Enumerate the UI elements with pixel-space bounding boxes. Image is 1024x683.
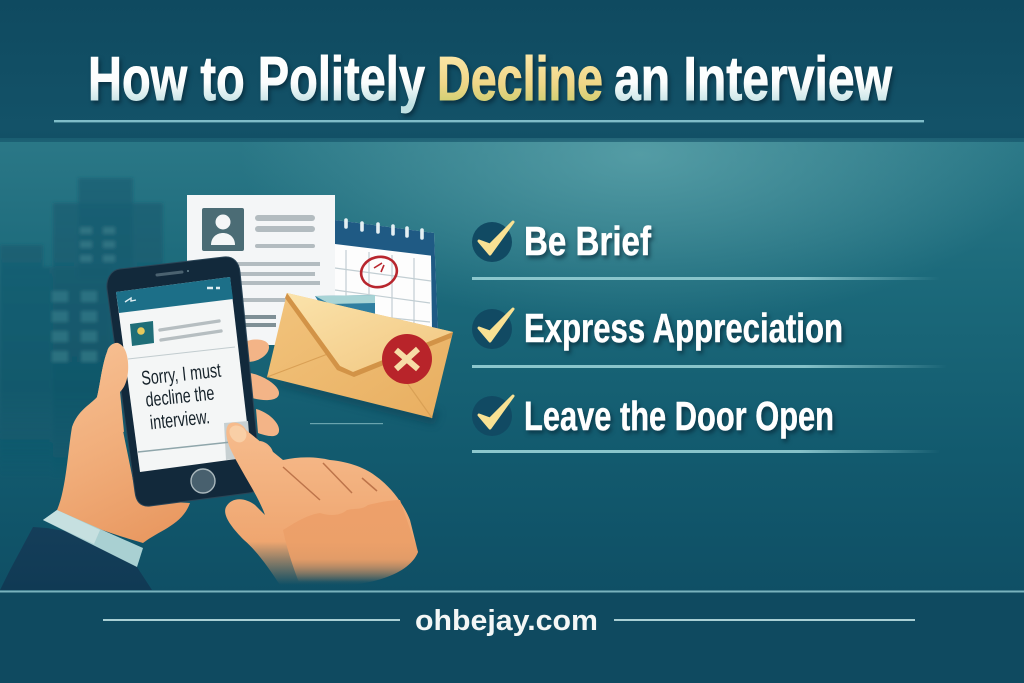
item: Leave the Door Open: Leave the Door Open <box>524 393 834 439</box>
item: Express Appreciation <box>472 305 947 368</box>
icon: calendar <box>335 220 438 335</box>
shirt cuff and jacket sleeve <box>0 510 152 590</box>
item: Be Brief: Be Brief <box>524 218 651 264</box>
phone message text <box>140 360 227 435</box>
phone message text: Sorry, I must <box>140 360 222 390</box>
title: an Interview <box>614 45 893 114</box>
title: How to Politely <box>88 45 425 114</box>
phone message text: interview. <box>149 406 211 434</box>
phone message text: decline the <box>145 383 215 412</box>
icon: envelope with red cross <box>267 293 453 425</box>
icon: left thumb <box>97 343 128 432</box>
item: Express Appreciation: Express Appreciation <box>524 305 843 351</box>
checklist <box>472 218 947 453</box>
item: Be Brief <box>472 218 940 280</box>
smartphone <box>107 257 261 506</box>
background city skyline <box>0 178 163 505</box>
footer: ohbejay.com <box>415 605 598 637</box>
right hand pressing screen <box>225 423 418 585</box>
icon: resume document <box>187 195 335 345</box>
title: Decline <box>437 45 603 114</box>
title <box>88 45 893 114</box>
left hand: palm and fingers behind phone <box>57 339 279 543</box>
footer <box>0 590 1024 683</box>
item: Leave the Door Open <box>472 393 940 453</box>
